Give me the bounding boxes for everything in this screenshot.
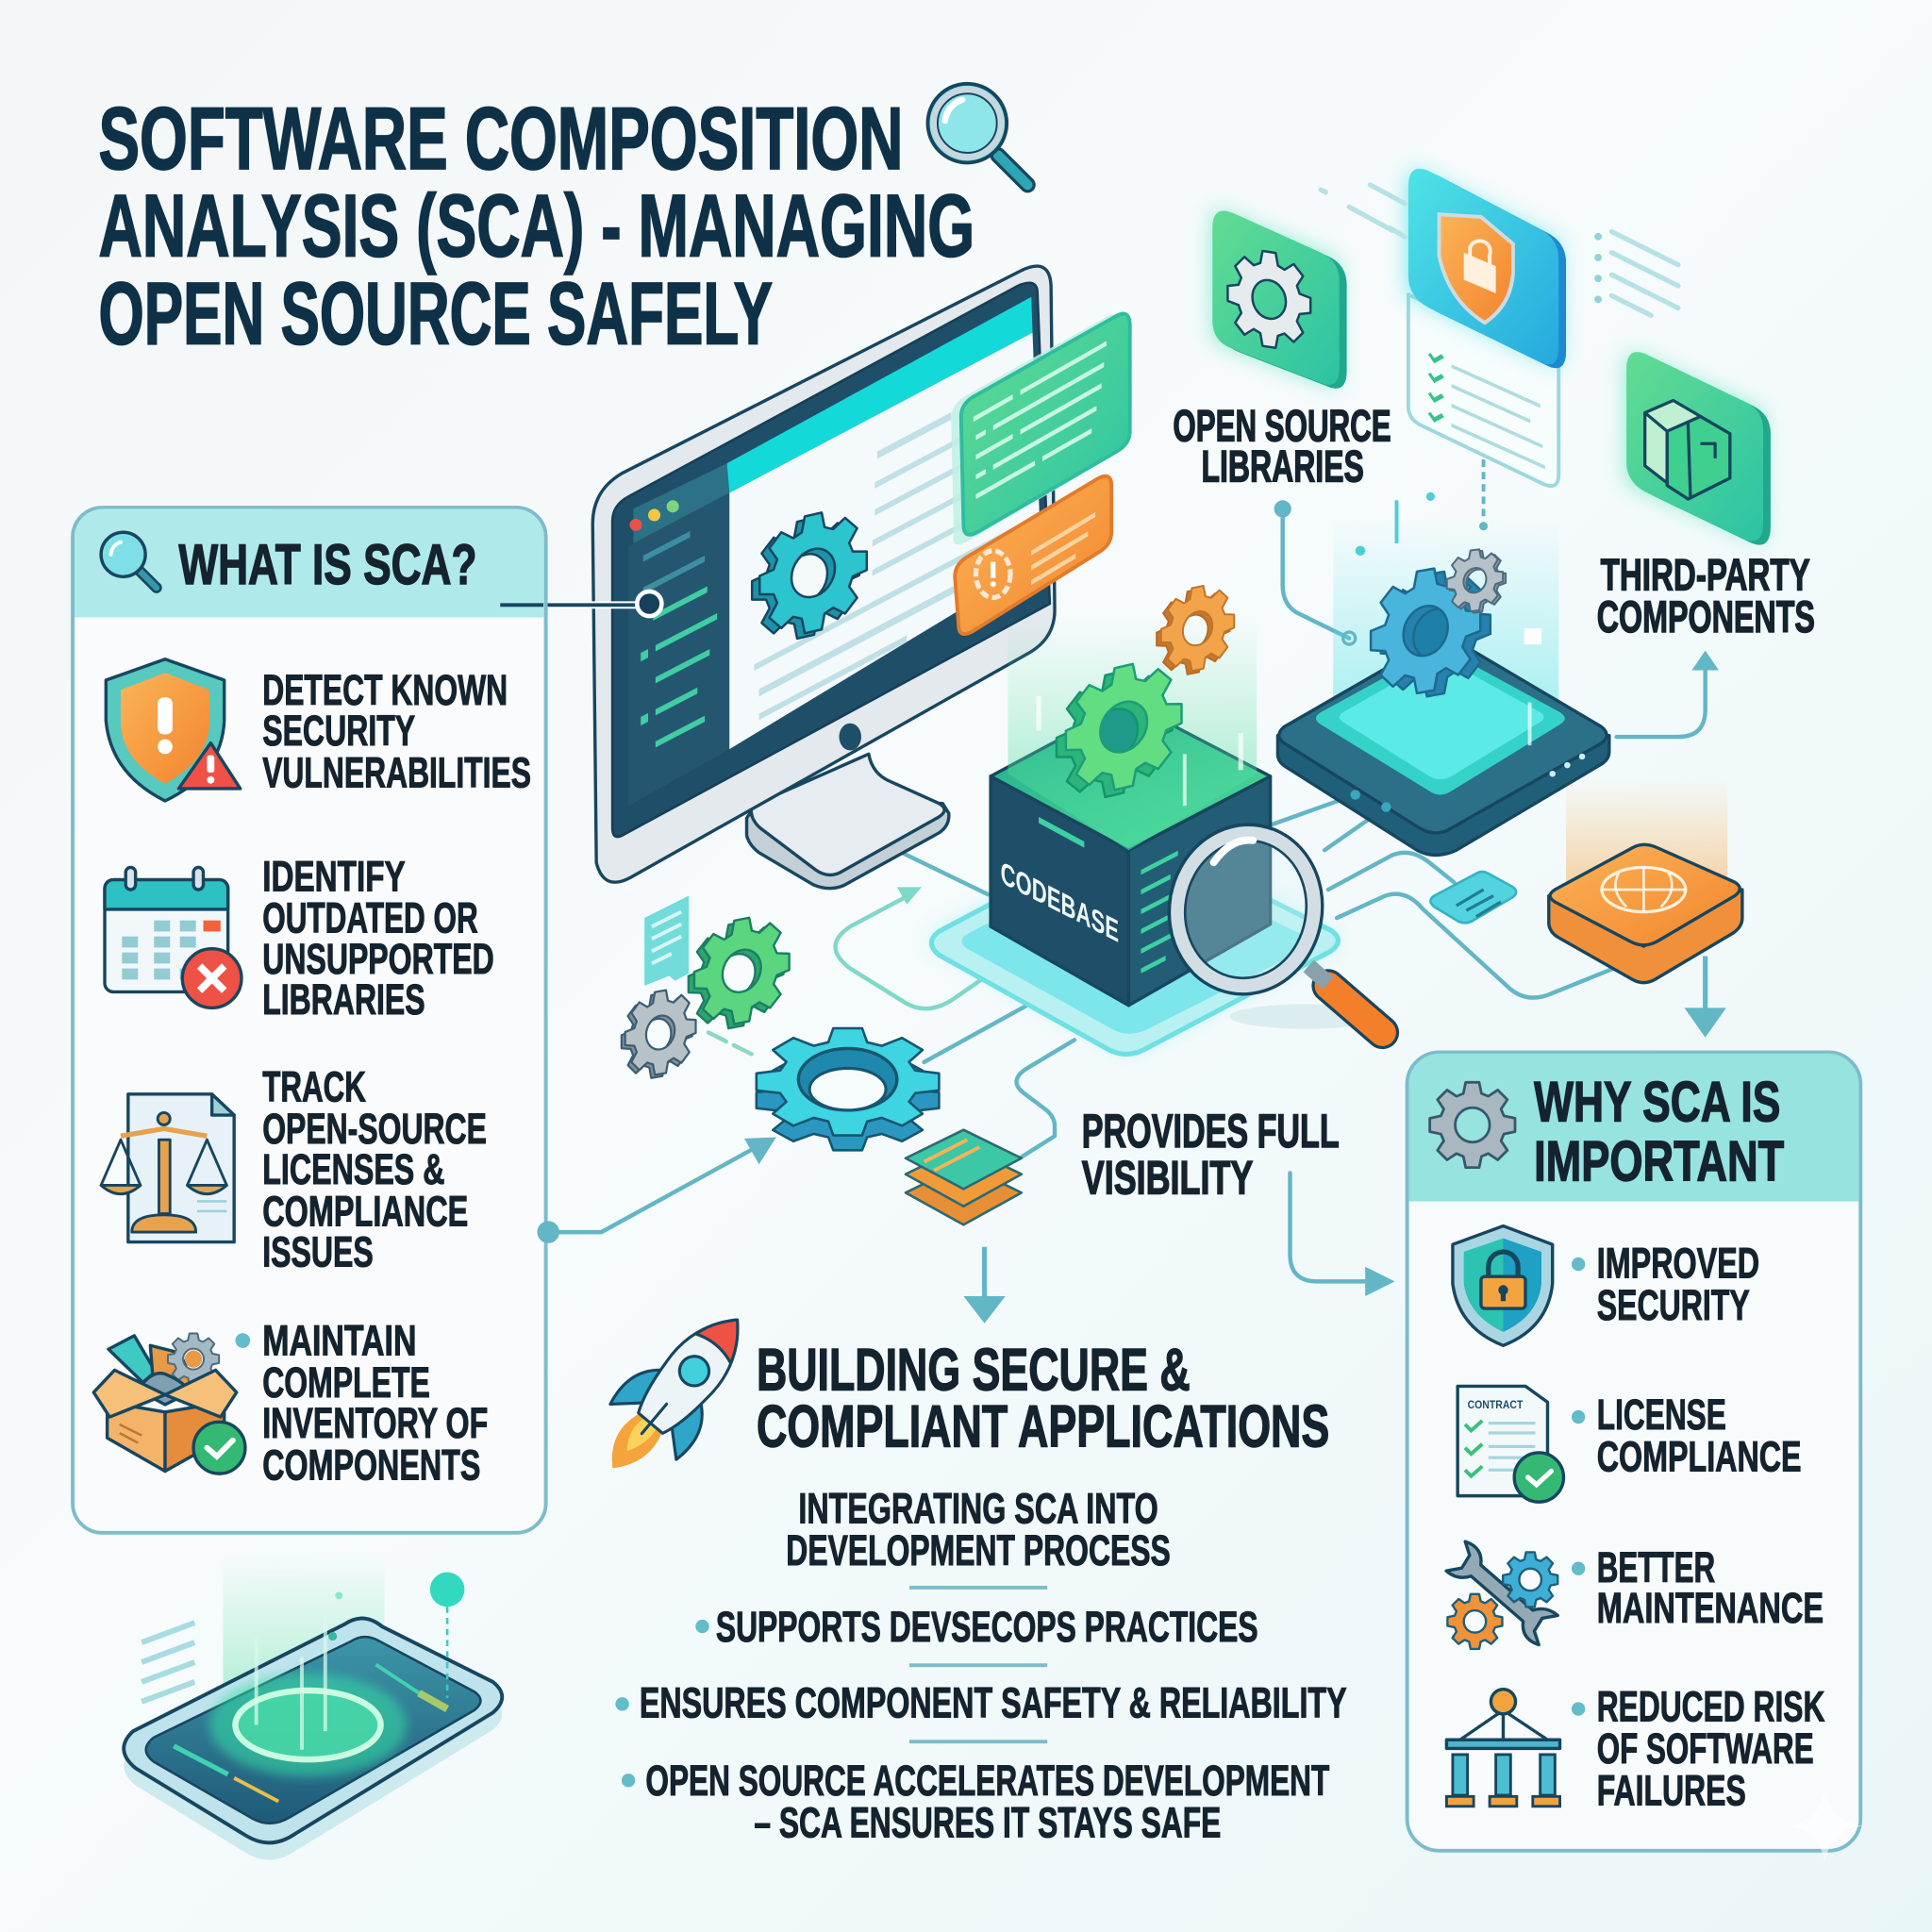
grey gear on platform xyxy=(1447,546,1506,616)
label: open source libraries: LIBRARIES xyxy=(1201,441,1364,491)
bullet xyxy=(235,1333,250,1348)
tile: open source gear xyxy=(1212,208,1347,389)
monitor stand xyxy=(747,754,949,889)
arrow: orange box to why panel xyxy=(1684,957,1726,1038)
item: reduced risk: FAILURES xyxy=(1597,1766,1746,1814)
item: identify: OUTDATED OR xyxy=(262,894,478,942)
item: license compliance xyxy=(1572,1391,1802,1481)
panel: what is sca xyxy=(73,508,559,1533)
dot on panel edge xyxy=(537,1221,559,1243)
item: track: TRACK xyxy=(262,1063,366,1111)
section: building secure heading: COMPLIANT APPLICATIONS xyxy=(757,1393,1329,1459)
tile: third-party box xyxy=(1626,351,1771,545)
item: track xyxy=(262,1063,487,1276)
label: provides full visibility: VISIBILITY xyxy=(1082,1152,1253,1205)
arrow: visibility to why panel xyxy=(1291,1173,1395,1296)
glow ticks xyxy=(1036,696,1243,806)
magnifier over codebase xyxy=(1156,812,1382,1033)
connector: what is sca to monitor xyxy=(500,591,661,616)
stack of cards xyxy=(906,1130,1022,1224)
item: identify: LIBRARIES xyxy=(262,975,425,1024)
title: OPEN SOURCE SAFELY xyxy=(98,263,773,362)
icon: title magnifier xyxy=(928,84,1027,185)
section: building secure heading xyxy=(757,1337,1329,1459)
gear on screen xyxy=(752,503,867,649)
orange globe box xyxy=(1549,776,1742,983)
green gear on cube xyxy=(1057,653,1181,808)
browser title strip xyxy=(633,463,729,543)
item: improved security: IMPROVED xyxy=(1597,1239,1759,1287)
orange floating gear xyxy=(1157,580,1234,680)
item: detect: SECURITY xyxy=(262,707,415,755)
why heading: WHY SCA IS xyxy=(1534,1071,1780,1134)
item: improved security: SECURITY xyxy=(1597,1281,1750,1329)
item: reduced risk: REDUCED RISK xyxy=(1597,1683,1824,1731)
icon: lock shield xyxy=(1453,1226,1553,1345)
monitor xyxy=(592,266,1055,889)
grey gear small xyxy=(622,985,696,1083)
item: detect: VULNERABILITIES xyxy=(262,749,531,797)
tile: security document xyxy=(1408,168,1566,486)
item: detect xyxy=(262,666,531,797)
orange alert panel xyxy=(955,476,1111,634)
codebase label: CODEBASE xyxy=(1001,856,1119,950)
right scanner glow xyxy=(1333,518,1558,789)
icon: pillars xyxy=(1446,1690,1560,1807)
watermark sparkle xyxy=(1788,1789,1862,1863)
item: track: LICENSES & xyxy=(262,1145,445,1193)
section: building secure heading: BUILDING SECURE & xyxy=(757,1337,1191,1403)
platform sparks xyxy=(1343,459,1541,812)
icon: rocket xyxy=(578,1291,772,1497)
why heading xyxy=(1534,1071,1784,1192)
icon: header gear xyxy=(1430,1082,1515,1168)
green glow column xyxy=(1008,616,1257,850)
section: integrating text xyxy=(615,1484,1347,1846)
icon: warning shield xyxy=(106,659,241,801)
header background xyxy=(75,508,544,617)
item: better maintenance: BETTER xyxy=(1597,1543,1715,1591)
item: maintain: MAINTAIN xyxy=(262,1317,416,1365)
green gear small xyxy=(689,910,790,1036)
icon: calendar xyxy=(105,868,242,1008)
glow ring xyxy=(209,1674,407,1776)
monitor body xyxy=(592,266,1055,882)
label: third-party components xyxy=(1597,550,1815,641)
panel: why sca is important xyxy=(1407,1052,1860,1851)
floating dot xyxy=(430,1573,464,1607)
why header background xyxy=(1409,1054,1858,1201)
side lines xyxy=(142,1623,194,1702)
why heading: IMPORTANT xyxy=(1534,1129,1784,1192)
label: open source libraries xyxy=(1173,401,1391,491)
power button xyxy=(839,724,861,750)
large cyan gear xyxy=(757,1028,939,1150)
blue tile xyxy=(1408,168,1558,366)
green arrow head xyxy=(897,887,922,905)
arrow: what is sca to gear xyxy=(548,1138,776,1232)
section: integrating text: INTEGRATING SCA INTO xyxy=(798,1484,1158,1532)
title xyxy=(98,89,974,362)
label: third-party components: COMPONENTS xyxy=(1597,591,1815,641)
title: ANALYSIS (SCA) - MANAGING xyxy=(98,176,974,275)
dot: open source connector xyxy=(1274,500,1291,518)
connectors behind illustration xyxy=(708,515,1706,1157)
light streaks xyxy=(257,1614,325,1750)
arrow: down to building secure xyxy=(963,1247,1006,1324)
item: license compliance: COMPLIANCE xyxy=(1597,1433,1802,1481)
item: identify xyxy=(262,852,494,1024)
item: track: ISSUES xyxy=(262,1228,374,1276)
small blue chip xyxy=(1430,872,1516,923)
item: track: OPEN-SOURCE xyxy=(262,1105,487,1153)
label: provides full visibility: PROVIDES FULL xyxy=(1082,1105,1340,1158)
heading: WHAT IS SCA? xyxy=(178,533,476,596)
shield on tile xyxy=(1440,214,1513,323)
icon: scales document xyxy=(101,1094,234,1242)
item: better maintenance xyxy=(1572,1543,1824,1632)
section: integrating text: SUPPORTS DEVSECOPS PRACTICES xyxy=(716,1603,1258,1651)
icon: contract xyxy=(1457,1386,1563,1502)
phone illustration xyxy=(124,1553,502,1860)
green cube bar xyxy=(1039,817,1084,848)
chat bubble icon xyxy=(644,896,689,986)
item: track: COMPLIANCE xyxy=(262,1188,468,1236)
phone screen bars xyxy=(174,1746,228,1774)
green code panel xyxy=(951,314,1130,544)
icon: box of components xyxy=(93,1334,245,1474)
item: maintain: COMPONENTS xyxy=(262,1441,480,1490)
label: third-party components: THIRD-PARTY xyxy=(1601,550,1810,600)
item: maintain xyxy=(262,1317,488,1490)
section: integrating text: ENSURES COMPONENT SAFETY & RELIABILITY xyxy=(640,1679,1347,1727)
item: identify: UNSUPPORTED xyxy=(262,935,494,983)
item: detect: DETECT KNOWN xyxy=(262,666,508,714)
item: reduced risk xyxy=(1572,1683,1824,1814)
phone body xyxy=(124,1619,502,1842)
item: better maintenance: MAINTENANCE xyxy=(1597,1584,1824,1632)
item: maintain: INVENTORY OF xyxy=(262,1399,488,1447)
blue gear on platform xyxy=(1371,558,1491,707)
icon: header magnifier xyxy=(101,532,157,588)
right platform xyxy=(1277,639,1609,855)
arrow up to third-party xyxy=(1691,651,1719,671)
small lines decoration xyxy=(1321,185,1678,315)
code sidebar xyxy=(628,492,729,806)
glow column xyxy=(223,1553,385,1762)
central codebase platform xyxy=(929,835,1341,1054)
section: integrating text: OPEN SOURCE ACCELERATES DEVELOPMENT xyxy=(645,1757,1329,1805)
item: improved security xyxy=(1572,1239,1759,1329)
item: reduced risk: OF SOFTWARE xyxy=(1597,1724,1814,1773)
item: identify: IDENTIFY xyxy=(262,852,406,900)
phone shadow xyxy=(124,1636,502,1860)
cyan bar xyxy=(727,297,1033,492)
cube side code xyxy=(1141,848,1183,974)
item: maintain: COMPLETE xyxy=(262,1358,430,1407)
document screen xyxy=(729,333,1041,749)
icon: wrench and gears xyxy=(1442,1538,1561,1649)
section: integrating text: – SCA ENSURES IT STAYS SAFE xyxy=(754,1798,1221,1846)
label: open source libraries: OPEN SOURCE xyxy=(1173,401,1391,451)
item: license compliance: LICENSE xyxy=(1597,1391,1726,1439)
label: provides full visibility xyxy=(1082,1105,1340,1205)
codebase cube xyxy=(991,702,1271,1006)
icon: contract: CONTRACT xyxy=(1468,1399,1524,1411)
title: SOFTWARE COMPOSITION xyxy=(98,89,903,188)
document below tile xyxy=(1408,294,1558,486)
section: integrating text: DEVELOPMENT PROCESS xyxy=(786,1526,1171,1574)
